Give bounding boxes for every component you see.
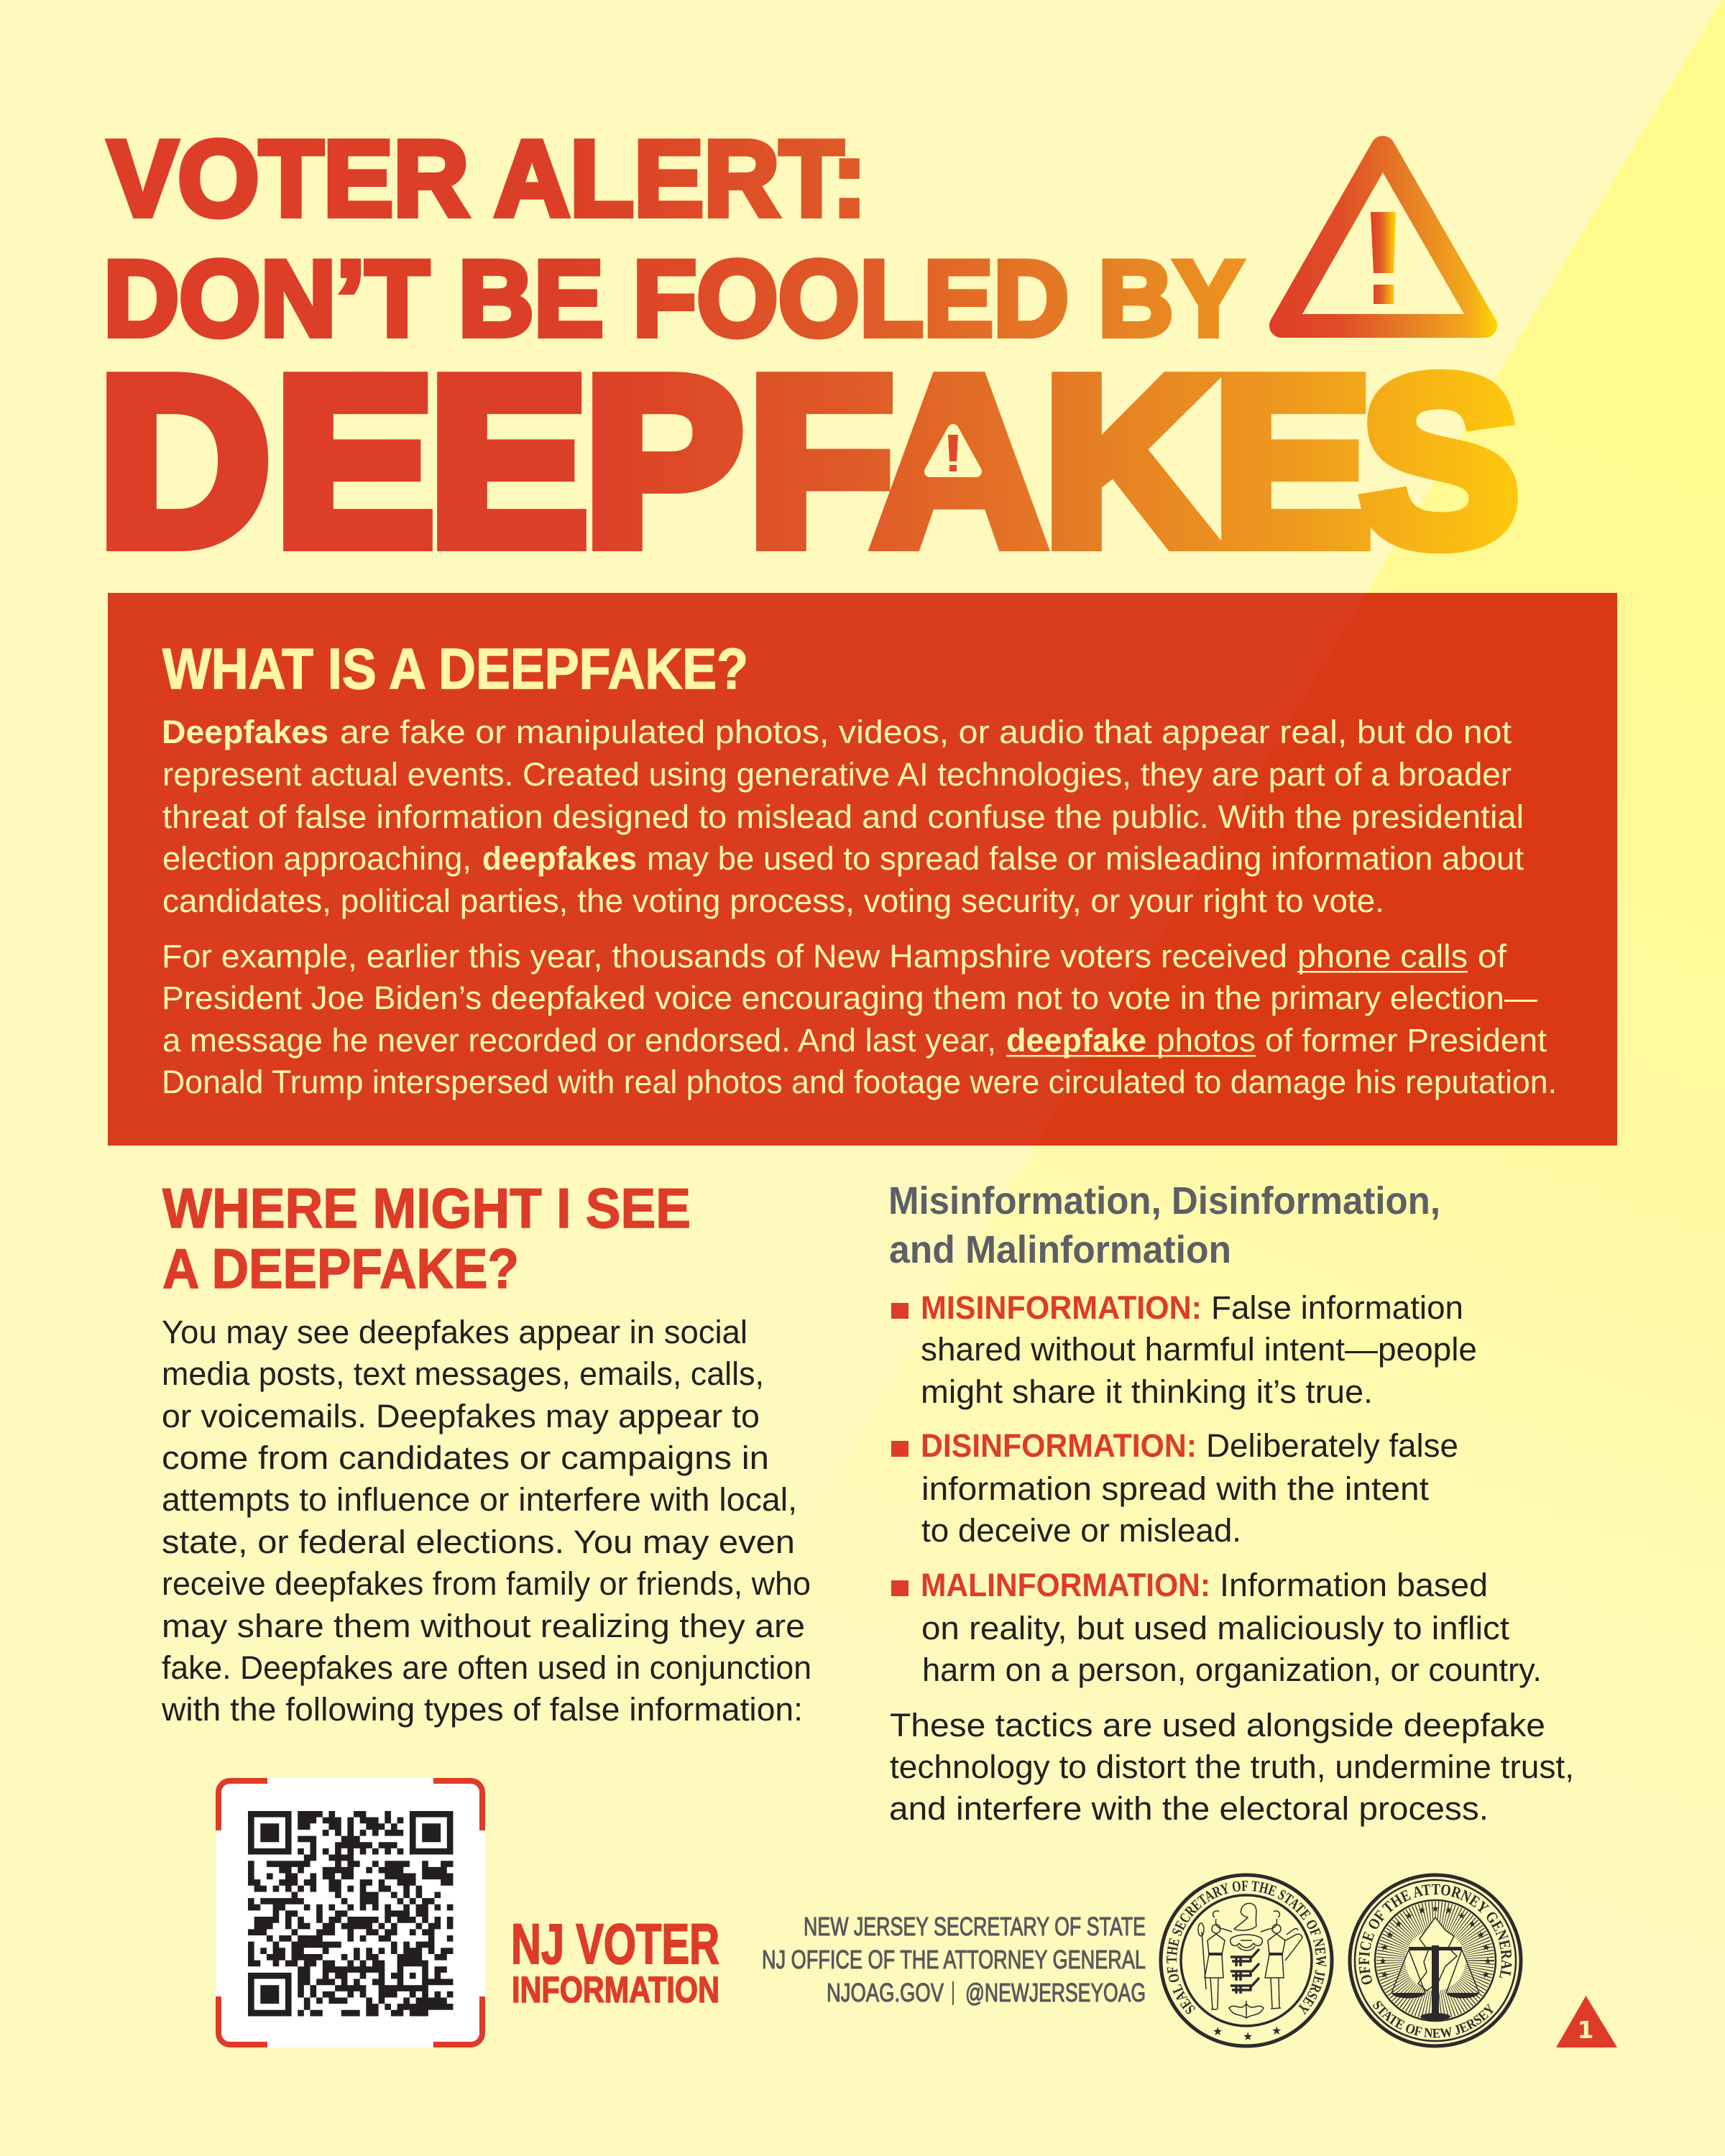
label: NJ voter information: INFORMATION [512,1969,719,2010]
list item: malinformation: MALINFORMATION: [921,1567,1210,1603]
list item: misinformation: False information [1211,1289,1463,1326]
text block: deepfake definition: Deepfakes [162,714,328,750]
title line: voter alert: VOTER ALERT: [108,118,867,239]
heading: where might I see a deepfake: A DEEPFAKE? [162,1237,519,1300]
text block: deepfake examples: Donald Trump interspersed with real photos and footage were circulated to damage his reputation. [162,1064,1557,1100]
text block: where deepfakes appear: attempts to influence or interfere with local, [162,1481,797,1518]
text block: where deepfakes appear: with the following types of false information: [161,1691,803,1728]
text block: where deepfakes appear: may share them without realizing they are [162,1608,805,1644]
heading: where might I see a deepfake [162,1176,691,1300]
heading: where might I see a deepfake: WHERE MIGHT I SEE [162,1176,691,1240]
title [98,118,1519,594]
list item: malinformation: on reality, but used maliciously to inflict [921,1610,1510,1646]
text block: deepfake examples: a message he never recorded or endorsed. And last year, [162,1022,996,1059]
QR code panel [216,1778,485,2047]
icon: warning triangle [1282,148,1485,326]
text block: deepfake examples [162,938,1557,1100]
icon: seal of the attorney general: STATE OF NEW JERSEY [1373,2001,1494,2038]
list item: disinformation: information spread with the intent [921,1470,1430,1507]
text block: where deepfakes appear: fake. Deepfakes are often used in conjunction [162,1649,811,1686]
text block: closing note on tactics: These tactics are used alongside deepfake [890,1707,1545,1743]
text block: deepfake definition: may be used to spread false or misleading information about [647,840,1524,877]
text block: deepfake examples: of former President [1265,1022,1547,1059]
list item: disinformation: DISINFORMATION: [921,1427,1197,1464]
footer credits: NEW JERSEY SECRETARY OF STATE [804,1912,1146,1941]
text block: deepfake definition [162,714,1524,919]
list item: misinformation: MISINFORMATION: [921,1289,1202,1326]
stars on the attorney general seal: ★★★★★★★★★★★★★★★ [1379,1904,1492,1981]
text block: closing note on tactics [889,1707,1574,1827]
icon: seal of the attorney general [1348,1873,1522,2048]
title line: deepfakes: DEEPFAKES [98,328,1519,594]
text block: deepfake examples: of [1478,938,1507,975]
footer credits: NJ OFFICE OF THE ATTORNEY GENERAL [762,1945,1146,1974]
page number triangle: 1 [1578,2016,1593,2044]
text block: where deepfakes appear: You may see deepfakes appear in social [162,1314,748,1350]
text block: deepfake definition: are fake or manipulated photos, videos, or audio that appear real, but do not [340,714,1512,750]
text block: closing note on tactics: technology to distort the truth, undermine trust, [890,1749,1574,1785]
text block: where deepfakes appear: or voicemails. Deepfakes may appear to [162,1398,760,1434]
text block: closing note on tactics: and interfere with the electoral process. [889,1790,1489,1827]
QR code [248,1811,453,2016]
text block: deepfake definition: election approaching, [162,840,472,877]
text block: deepfake definition: candidates, political parties, the voting process, voting security, or your right to vote. [162,883,1384,919]
list item: disinformation: Deliberately false [1206,1427,1458,1464]
heading: misinformation, disinformation, and malinformation [888,1179,1440,1271]
QR corner brackets [218,1781,482,2045]
footer credits [762,1912,1146,2007]
text block: deepfake examples: President Joe Biden’s deepfaked voice encouraging them not to vote in the primary election— [162,980,1537,1016]
text block: where deepfakes appear: state, or federal elections. You may even [162,1524,795,1560]
list item: misinformation: might share it thinking it’s true. [921,1373,1373,1410]
icon: seal of the attorney general: OFFICE OF THE ATTORNEY GENERAL [1358,1884,1512,1985]
label: NJ voter information: NJ VOTER [511,1912,719,1976]
text block: where deepfakes appear [161,1314,811,1728]
icon: seal of the secretary of state: SEAL OF THE SECRETARY OF THE STATE OF NEW JERSEY [1167,1881,1326,2015]
heading: misinformation, disinformation, and malinformation: Misinformation, Disinformation, [888,1179,1440,1222]
list item: disinformation [891,1427,1458,1549]
text block: deepfake examples: deepfake [1006,1022,1146,1059]
text block: deepfake examples: photos [1156,1022,1256,1059]
list item: malinformation [891,1567,1542,1688]
icon: small warning triangle in the letter A [919,392,1000,507]
stars on the secretary of state seal: ★★★ [1213,2024,1282,2043]
text block: where deepfakes appear: come from candidates or campaigns in [162,1439,769,1476]
list item: malinformation: harm on a person, organization, or country. [922,1651,1542,1688]
list item: malinformation: Information based [1220,1567,1488,1603]
panel: what is a deepfake [108,593,1617,1146]
heading: misinformation, disinformation, and malinformation: and Malinformation [889,1228,1231,1271]
text block: deepfake definition: threat of false information designed to mislead and confuse the public. With the presidential [162,798,1524,835]
heading: what is a deepfake: WHAT IS A DEEPFAKE? [162,637,748,701]
page number triangle [1556,1996,1617,2047]
list item: disinformation: to deceive or mislead. [921,1512,1241,1549]
list item: misinformation [891,1289,1477,1410]
text block: deepfake definition: represent actual events. Created using generative AI technologies, they are part of a broader [162,756,1512,793]
list item: misinformation: shared without harmful intent—people [921,1331,1477,1368]
title line: don't be fooled by: DON’T BE FOOLED BY [104,238,1243,359]
footer credits: NJOAG.GOV [827,1978,944,2007]
text block: where deepfakes appear: media posts, text messages, emails, calls, [162,1355,764,1392]
text block: deepfake examples: For example, earlier this year, thousands of New Hampshire voters received [162,938,1287,975]
text block: deepfake examples: phone calls [1297,938,1468,975]
text block: where deepfakes appear: receive deepfakes from family or friends, who [162,1565,811,1602]
label: NJ voter information [511,1912,719,2010]
text block: deepfake definition: deepfakes [482,840,637,877]
footer credits: @NEWJERSEYOAG [965,1978,1146,2007]
